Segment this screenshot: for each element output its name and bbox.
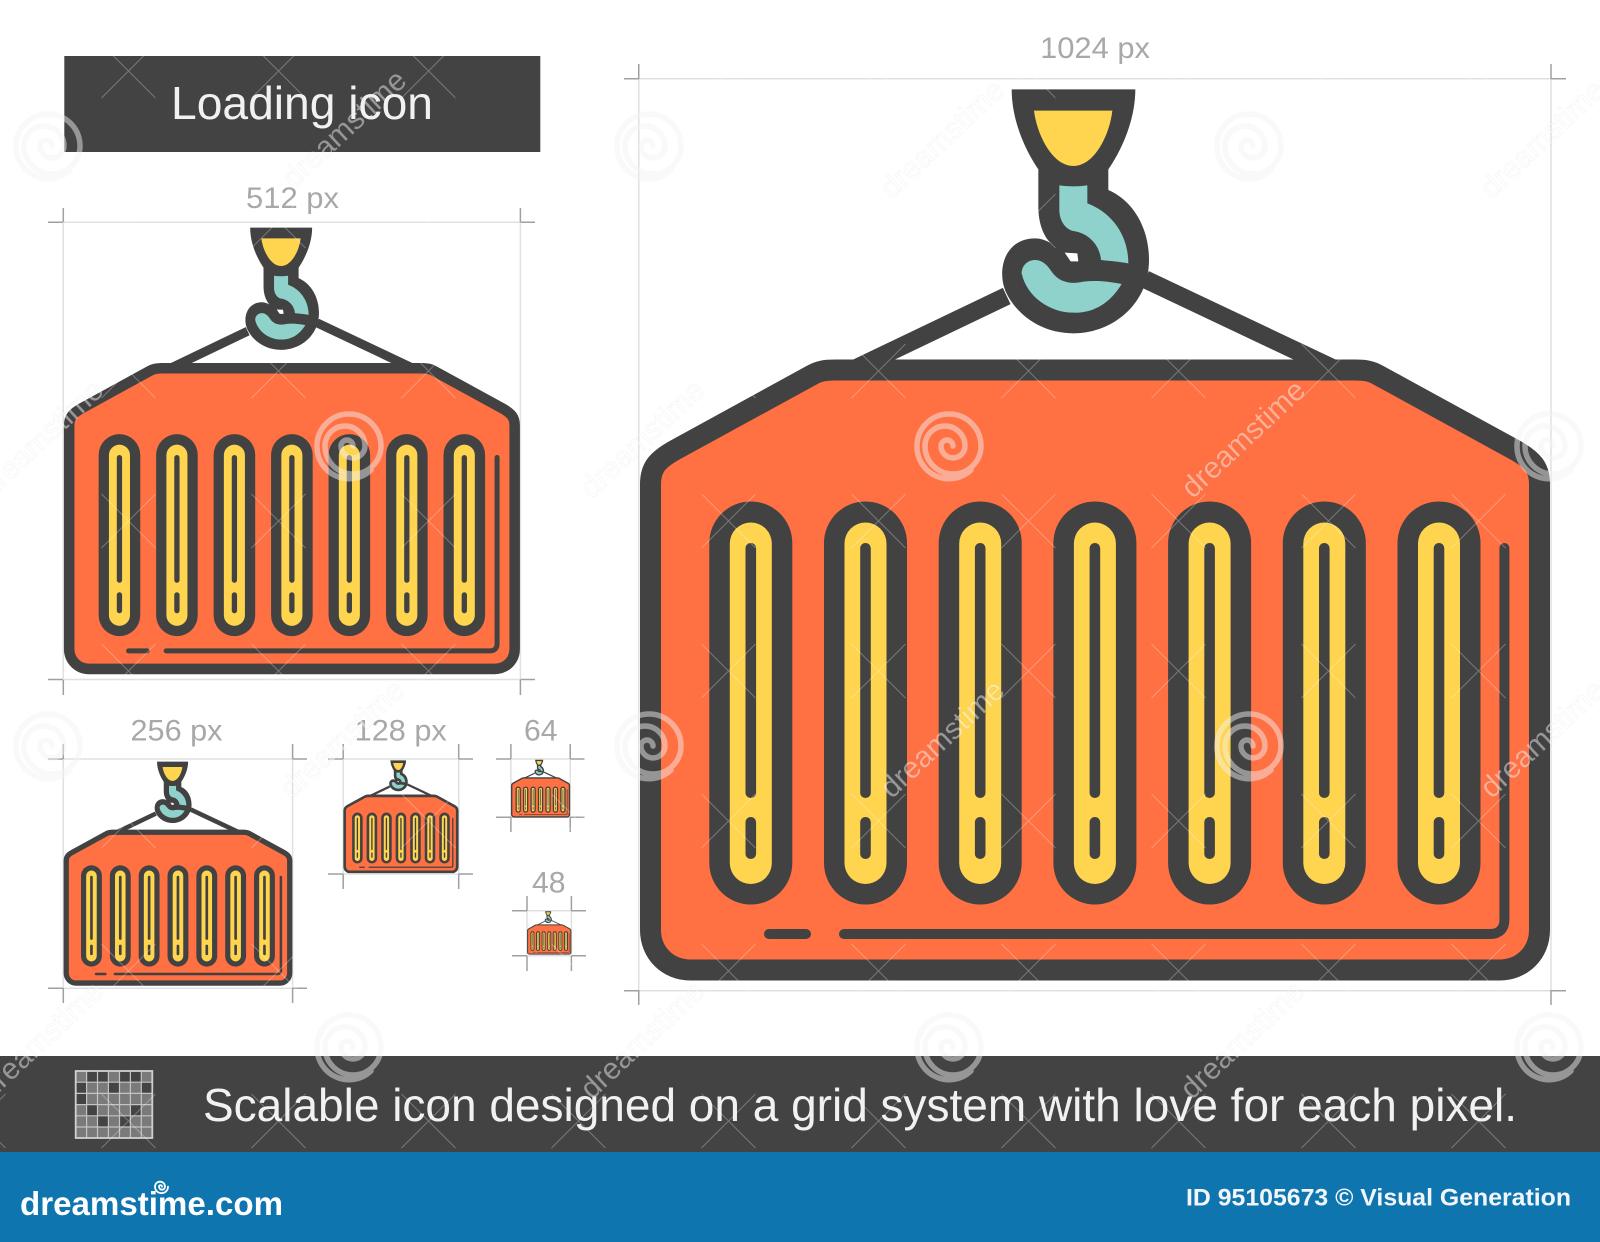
image credit: ID 95105673 © Visual Generation	[1186, 1185, 1571, 1212]
hook gap	[1065, 253, 1078, 261]
watermark text: dreamstime	[276, 64, 413, 195]
size label: 1024 px: 1024 px	[1040, 32, 1150, 65]
icon: container on hook, 1024 px	[650, 89, 1540, 970]
watermark text: dreamstime	[274, 674, 411, 805]
ropes	[848, 279, 1341, 372]
size label: 256 px: 256 px	[130, 715, 222, 748]
corrugated slot	[709, 502, 792, 904]
slot 6	[1283, 502, 1366, 904]
watermark text: dreamstime	[574, 975, 711, 1106]
watermark text: dreamstime	[874, 74, 1011, 205]
title bar: Loading icon	[171, 77, 433, 129]
container body	[650, 370, 1540, 970]
hook upper	[1059, 185, 1128, 263]
watermark text: dreamstime	[874, 674, 1011, 805]
logo spiral	[155, 1182, 168, 1193]
size label: 512 px: 512 px	[246, 182, 339, 215]
slot 2	[824, 502, 907, 904]
watermark text: dreamstime	[1175, 374, 1312, 505]
watermark text: dreamstime	[1174, 975, 1311, 1106]
icon: 512 px	[69, 228, 515, 669]
size label: 48: 48	[532, 867, 566, 900]
footer bar	[0, 1152, 1600, 1242]
inner highlight line	[769, 548, 1504, 934]
slot 4	[1053, 502, 1136, 904]
bottom caption bar: Scalable icon designed on a grid system with love for each pixel.	[203, 1079, 1517, 1131]
slot 3	[939, 502, 1022, 904]
footer logo: dreamstime.com	[20, 1185, 283, 1222]
slot 5	[1168, 502, 1251, 904]
hook silhouette	[1002, 89, 1149, 333]
watermark text: dreamstime	[574, 374, 711, 505]
icon: 48 px	[528, 911, 571, 954]
watermark spirals	[16, 114, 1581, 1080]
hook lower	[1022, 260, 1122, 313]
size label: 64: 64	[524, 715, 558, 748]
size guides	[48, 64, 1566, 1005]
slot 7	[1398, 502, 1480, 904]
icon: pixel grid	[76, 1071, 152, 1138]
size label: 128 px: 128 px	[355, 715, 447, 748]
crane hook	[1002, 89, 1149, 333]
icon: 256 px	[66, 762, 290, 983]
icon: 128 px	[345, 760, 457, 872]
icon: 64 px	[512, 760, 569, 817]
bottom caption bar	[0, 1056, 1600, 1152]
title bar	[64, 56, 540, 152]
hook block	[1034, 111, 1112, 166]
